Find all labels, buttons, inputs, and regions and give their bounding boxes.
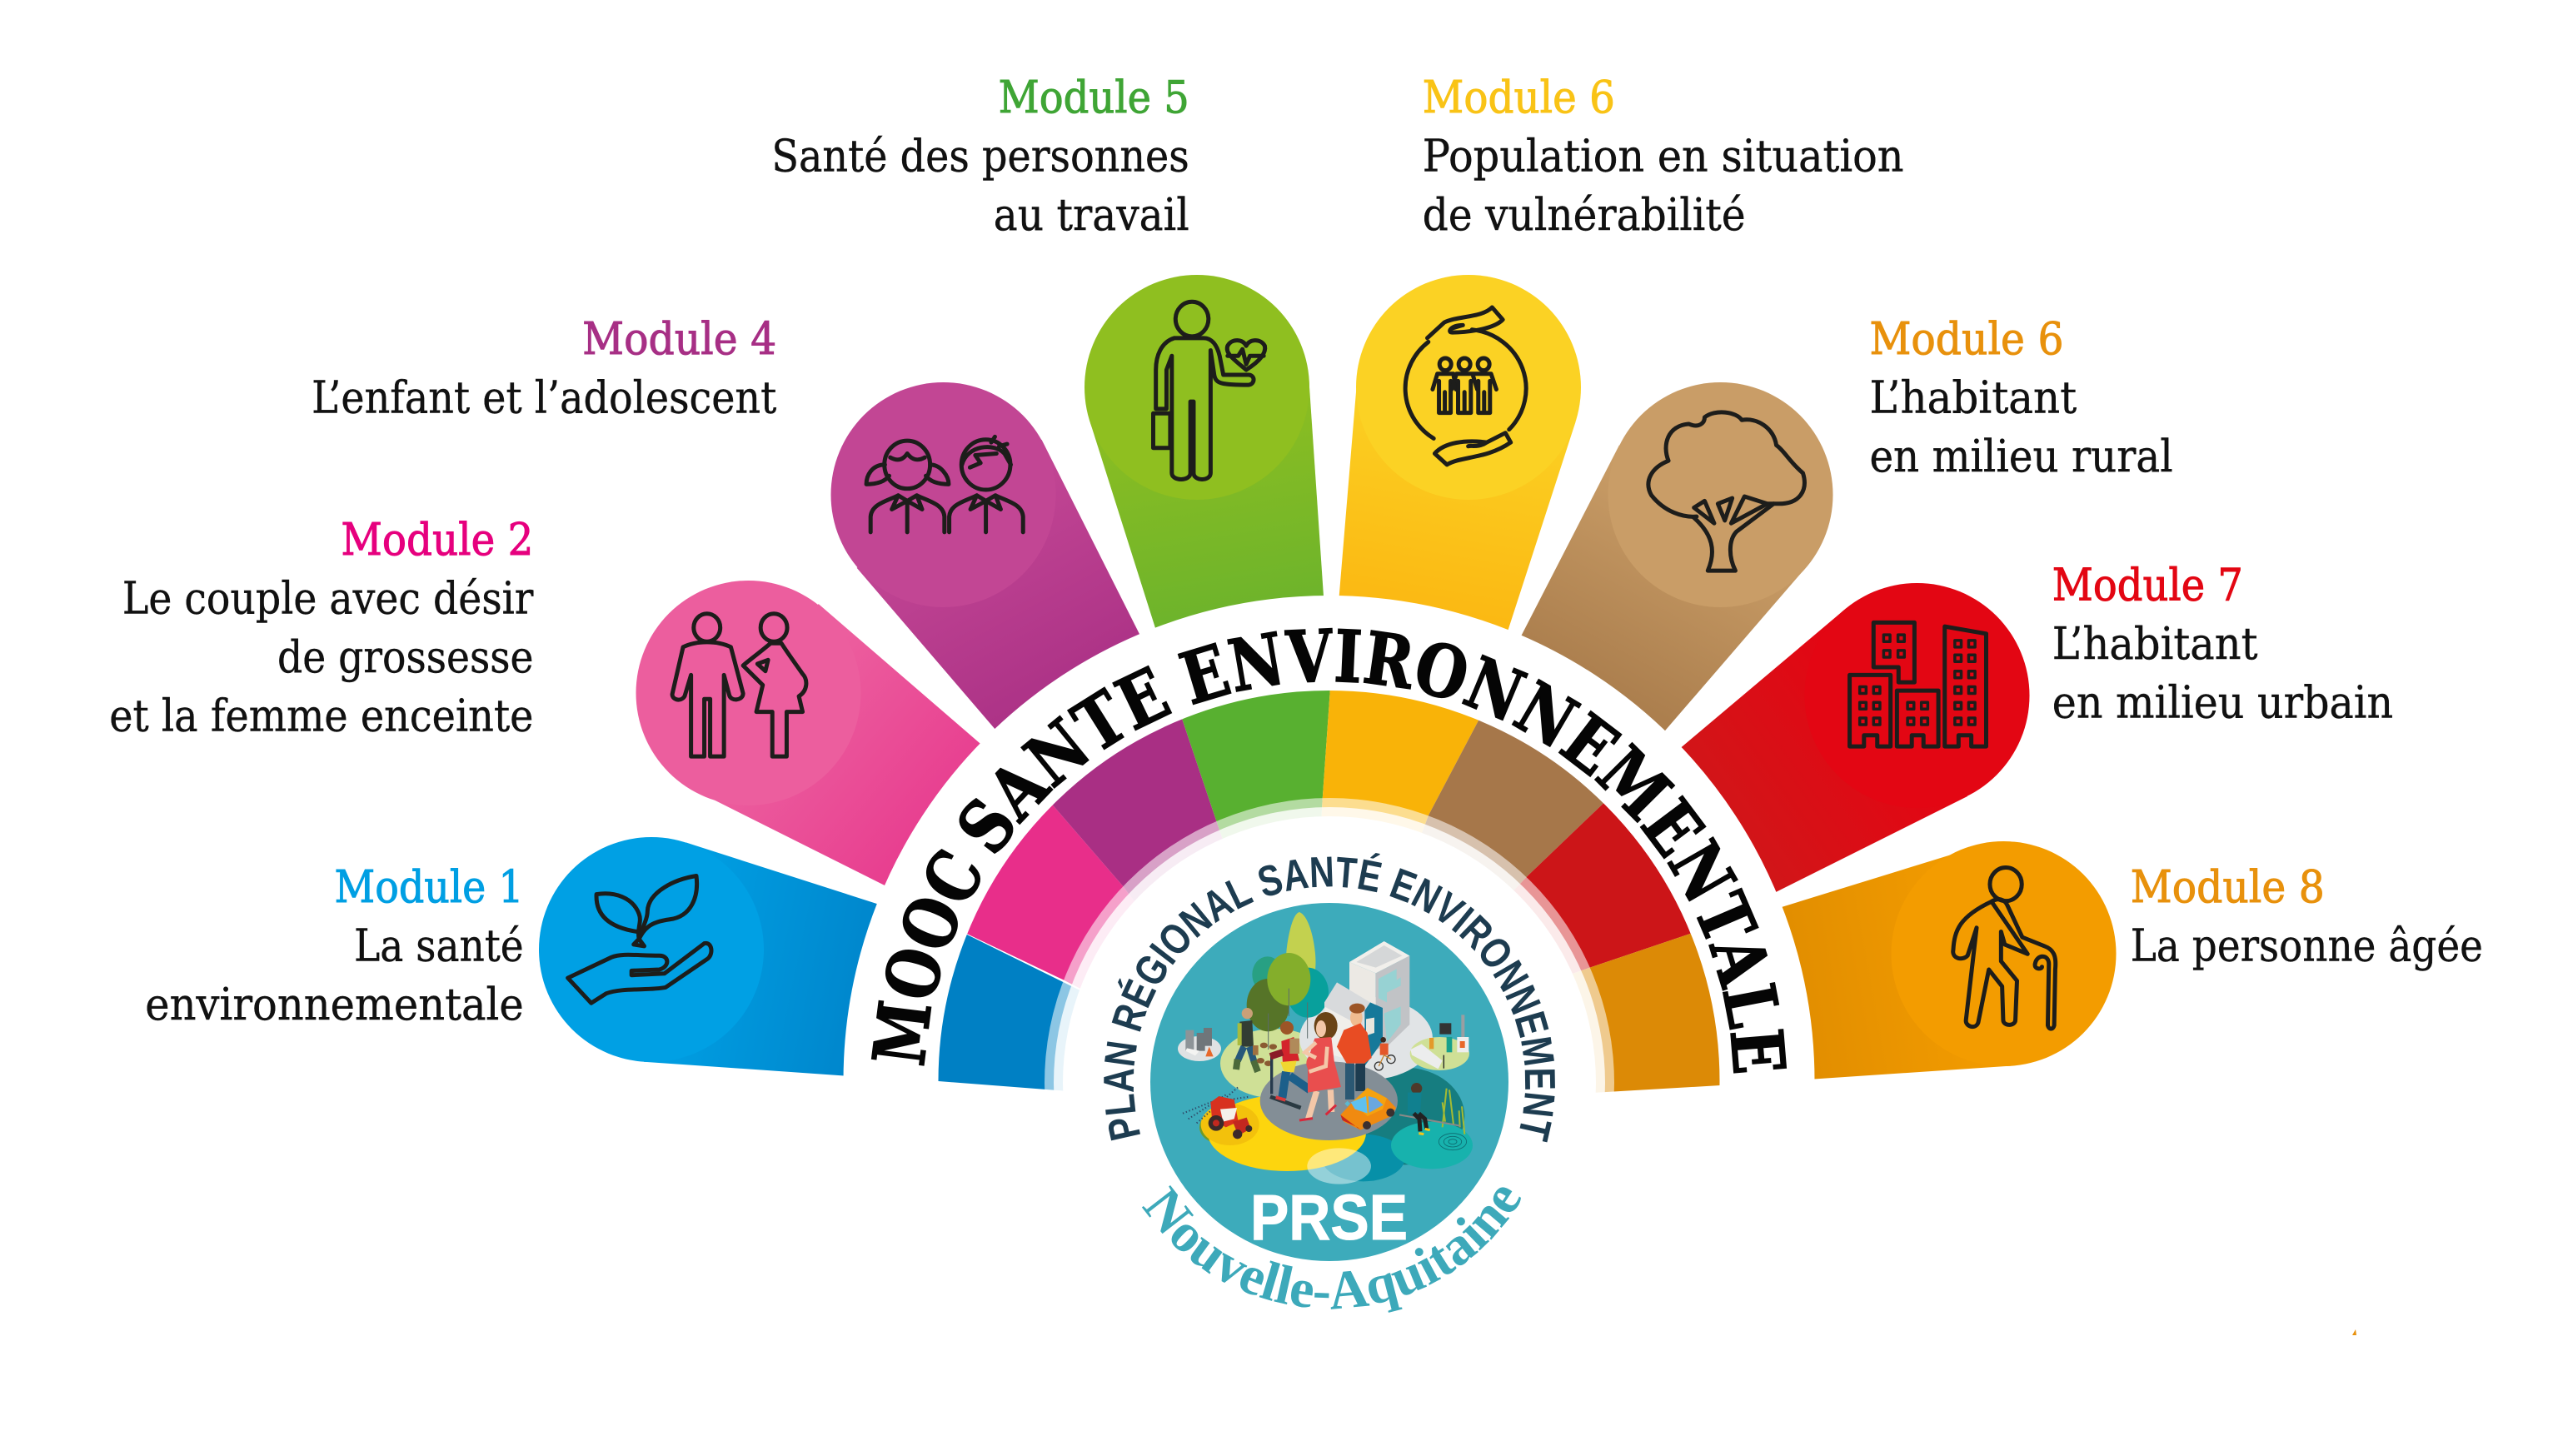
text block: module 7 [2052,561,2393,729]
text block: module 5 [771,72,1189,241]
text block: module 6 rural: Module 6 [1869,314,2064,365]
pregnant woman [1299,1012,1341,1120]
inner colored sectors [938,691,1719,1093]
text block: module 8: La personne âgée [2131,921,2483,972]
panel: module 6 petal [1336,275,1581,662]
PRSE: PRSE [1250,1182,1408,1254]
text block: module 2: Le couple avec désir [122,573,534,624]
main title on arc: SANTE [960,665,1173,854]
text block: module 1: environnementale [145,980,524,1030]
text block: module 1: La santé [354,921,524,972]
plant pots [1257,1043,1277,1066]
text block: module 6: Population en situation [1423,132,1904,182]
tractor [1183,1087,1252,1139]
main title on arc: MOOC [871,849,980,1066]
text block: module 6: Module 6 [1423,72,1615,123]
text block: module 7: L’habitant [2052,619,2258,670]
panel: module 7 petal [1657,583,2029,901]
text block: module 5: Santé des personnes [771,132,1189,182]
text block: module 7: en milieu urbain [2052,678,2393,729]
icon: tree [1648,412,1804,571]
car [1340,1088,1396,1130]
main title on arc: ENVIRONNEMENTALE [1178,628,1788,1074]
text block: module 4: Module 4 [582,314,776,365]
tower building [1349,941,1409,1050]
panel: module 2 petal [636,581,1016,901]
panel: module 1 petal [539,837,908,1078]
text block: module 5: Module 5 [999,72,1189,123]
central white disc with halo rings [1045,798,1614,1368]
panel: module 5 petal [1085,275,1326,662]
text block: module 2: de grossesse [277,632,533,683]
text block: module 7: Module 7 [2052,561,2243,611]
plan regional arc text: PLAN RÉGIONAL SANTÉ ENVIRONNEMENT [1104,853,1555,1143]
cyclist [1374,1037,1395,1070]
text block: module 2: et la femme enceinte [109,691,533,741]
icon: children [866,436,1023,532]
text block: module 6: de vulnérabilité [1423,190,1746,241]
text block: module 2: Module 2 [341,515,533,566]
panel: module 8 petal [1749,841,2116,1081]
text block: module 1: Module 1 [334,862,524,913]
text block: module 1 [145,862,524,1030]
icon: protecting hands around people [1405,307,1526,465]
walking man [1236,1008,1259,1072]
panel: module 6 rural petal [1508,382,1832,754]
text block: module 6 rural [1869,314,2173,482]
house [1324,982,1383,1066]
panel: module 4 petal [831,382,1154,754]
main title on arc [871,628,1788,1074]
logo disc [1150,903,1508,1261]
icon: couple [672,614,806,756]
text block: module 8: Module 8 [2131,862,2325,913]
home scene [1410,1015,1469,1070]
boy on scooter [1270,1021,1310,1108]
text block: module 5: au travail [994,190,1189,241]
white band [891,643,1768,1456]
Nouvelle-Aquitaine arc text: Nouvelle-Aquitaine [1142,1185,1521,1313]
text block: module 4: L’enfant et l’adolescent [312,373,776,424]
icon: elderly person with cane [1953,867,2056,1029]
text block: module 6 [1423,72,1904,241]
icon: worker with heart [1153,302,1265,479]
text block: module 2 [109,515,534,741]
text block: module 4 [312,314,776,424]
logo illustration [1178,912,1473,1184]
text block: module 6 rural: L’habitant [1869,373,2077,424]
text block: module 6 rural: en milieu rural [1869,431,2173,482]
icon: hand with plant [568,876,711,1003]
trees [1247,912,1329,1050]
man in orange jacket [1337,1004,1372,1105]
text block: module 8 [2131,862,2483,972]
icon: city buildings [1850,622,1986,746]
fisher with reeds [1399,1083,1467,1150]
factory [1178,1028,1221,1061]
